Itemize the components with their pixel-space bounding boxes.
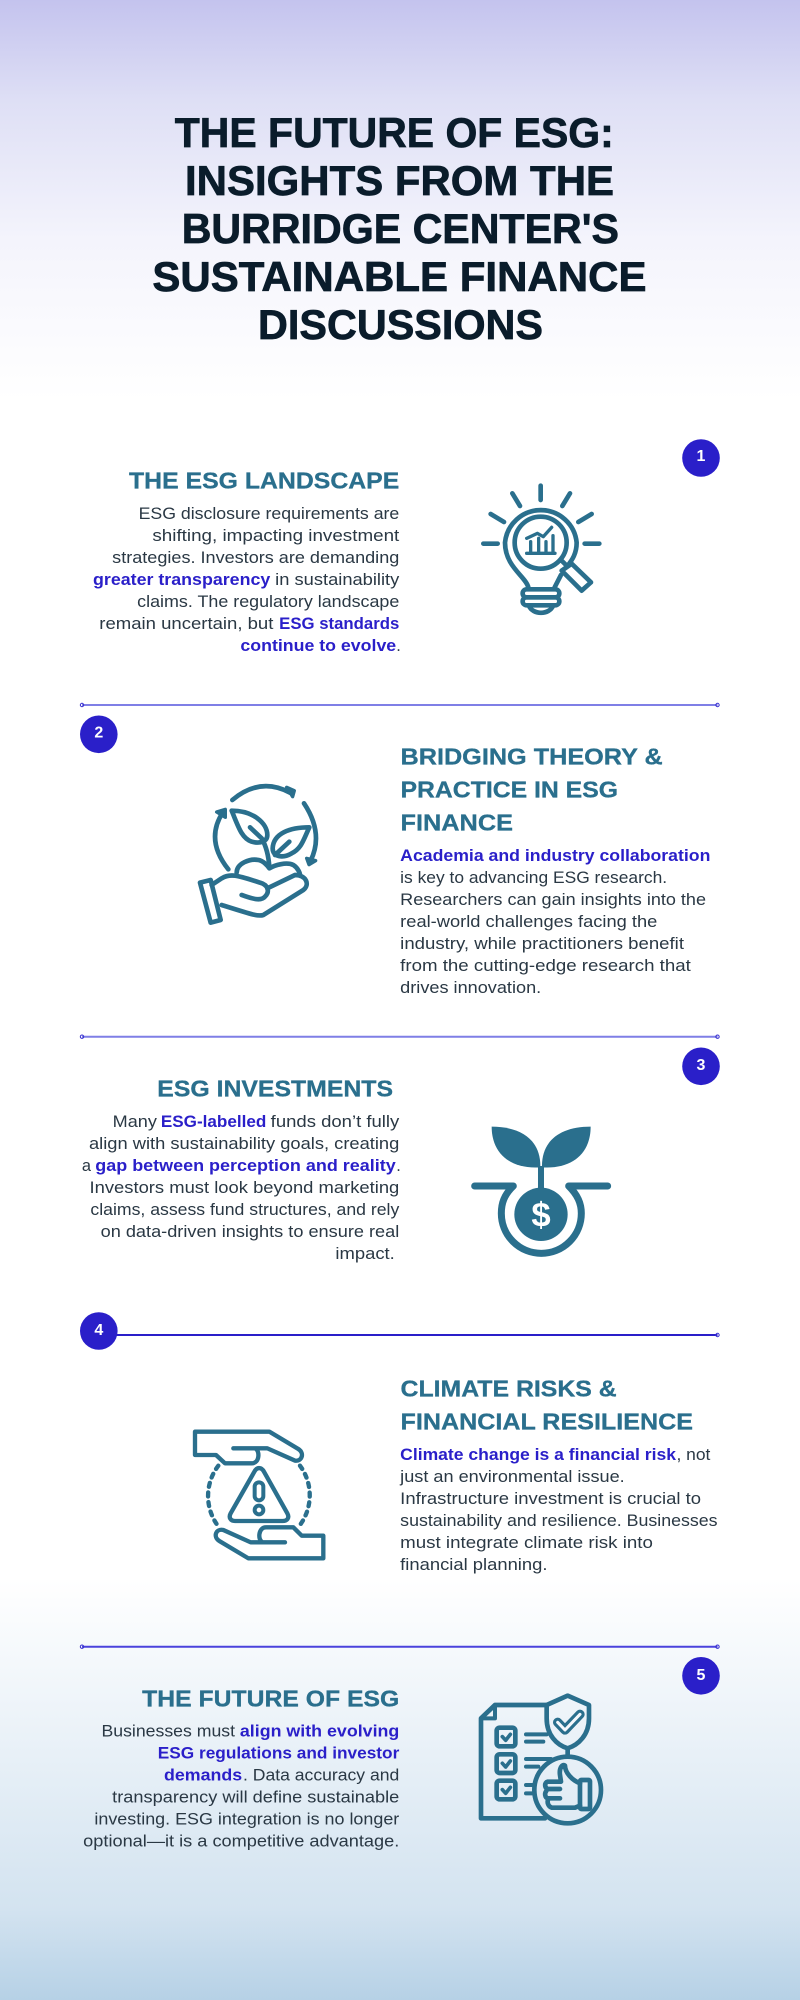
text block: the ESG landscape: in sustainability (275, 571, 400, 589)
text block: climate risks: Climate change is a financial risk (400, 1446, 677, 1464)
panel: ESG investments (82, 1048, 720, 1263)
icon: sprout growing from dollar coin (475, 1127, 608, 1253)
number badge 1: 1 (697, 448, 706, 465)
text block: ESG investments: Many (113, 1113, 158, 1131)
text block: the ESG landscape (93, 505, 401, 655)
text block: ESG investments: gap between perception and reality (95, 1157, 397, 1175)
heading: climate risks: FINANCIAL RESILIENCE (400, 1408, 693, 1434)
text block: bridging theory and practice: drives innovation. (400, 979, 541, 997)
text block: climate risks: just an environmental issue. (399, 1468, 625, 1486)
text block: the ESG landscape: continue to evolve (240, 637, 396, 655)
text block: the ESG landscape: remain uncertain, but (99, 615, 274, 633)
text block: bridging theory and practice: Academia and industry collaboration (400, 847, 710, 865)
text block: bridging theory and practice: Researchers can gain insights into the (400, 891, 706, 909)
panel: bridging theory and practice (80, 716, 710, 997)
divider 4 (80, 1645, 719, 1648)
text block: the ESG landscape: greater transparency (93, 571, 271, 589)
text block: the ESG landscape: shifting, impacting investment (152, 527, 400, 545)
text block: bridging theory and practice: real-world challenges facing the (400, 913, 657, 931)
panel: climate risks (80, 1312, 718, 1574)
panel: the ESG landscape (93, 439, 720, 655)
text block: bridging theory and practice (400, 847, 710, 997)
divider 2 (80, 1035, 719, 1038)
text block: the future of ESG: ESG regulations and investor (158, 1745, 400, 1763)
text block: the future of ESG (83, 1723, 400, 1851)
icon: hand holding plant with cycle arrows (200, 786, 316, 923)
title: INSIGHTS FROM THE (185, 157, 614, 204)
text block: ESG investments: claims, assess fund structures, and rely (90, 1201, 400, 1219)
divider 1 (80, 703, 719, 707)
title: BURRIDGE CENTER'S (182, 205, 619, 252)
text block: the ESG landscape: ESG standards (279, 615, 399, 633)
text block: the ESG landscape: ESG disclosure requirements are (139, 505, 399, 523)
icon: hands protecting warning triangle (195, 1432, 323, 1558)
text block: climate risks: sustainability and resilience. Businesses (400, 1512, 718, 1530)
number badge 3: 3 (697, 1057, 706, 1074)
text block: the future of ESG: Businesses must (102, 1723, 235, 1741)
text block: ESG investments (82, 1113, 401, 1263)
text block: the ESG landscape: strategies. Investors are demanding (112, 549, 399, 567)
text block: ESG investments: funds don’t fully (271, 1113, 400, 1131)
text block: the future of ESG: align with evolving (240, 1723, 399, 1741)
text block: climate risks: , not (676, 1446, 711, 1464)
text block: climate risks (399, 1446, 718, 1574)
text block: ESG investments: ESG-labelled (161, 1113, 266, 1131)
text block: ESG investments: on data-driven insights to ensure real (101, 1223, 399, 1241)
text block: ESG investments: Investors must look beyond marketing (90, 1179, 399, 1197)
text block: ESG investments: impact. (335, 1245, 395, 1263)
heading: climate risks: CLIMATE RISKS & (400, 1375, 617, 1401)
title: DISCUSSIONS (258, 301, 543, 348)
number badge 2: 2 (94, 724, 103, 742)
text block: bridging theory and practice: is key to advancing ESG research. (400, 869, 667, 887)
icon: lightbulb with magnifier and chart (483, 486, 599, 613)
heading: climate risks (400, 1375, 693, 1434)
icon: sprout growing from dollar coin: $ (531, 1196, 551, 1234)
text block: the future of ESG: demands (164, 1767, 242, 1785)
number badge 4: 4 (94, 1322, 103, 1339)
text block: ESG investments: align with sustainability goals, creating (89, 1135, 399, 1153)
title (152, 109, 646, 348)
text block: ESG investments: a (82, 1157, 92, 1175)
text block: climate risks: financial planning. (400, 1556, 548, 1574)
text block: the ESG landscape: . (396, 637, 401, 655)
heading: the future of ESG: THE FUTURE OF ESG (142, 1685, 399, 1711)
text block: ESG investments: . (396, 1157, 401, 1175)
text block: climate risks: Infrastructure investment is crucial to (400, 1490, 701, 1508)
number badge 2 (80, 716, 118, 753)
number badge 4 (80, 1312, 118, 1350)
text block: the ESG landscape: claims. The regulatory landscape (137, 593, 399, 611)
number badge 3 (682, 1048, 720, 1085)
text block: the future of ESG: transparency will define sustainable (112, 1789, 399, 1807)
title: SUSTAINABLE FINANCE (152, 253, 646, 300)
text block: climate risks: must integrate climate risk into (400, 1534, 653, 1552)
panel: the future of ESG (83, 1657, 720, 1851)
number badge 5: 5 (697, 1667, 706, 1684)
heading: bridging theory and practice: FINANCE (400, 809, 513, 835)
heading: bridging theory and practice: PRACTICE IN ESG (400, 776, 618, 802)
heading: bridging theory and practice: BRIDGING THEORY & (400, 743, 663, 769)
icon: checklist with shield and thumbs up (481, 1696, 601, 1823)
heading: bridging theory and practice (400, 743, 663, 835)
heading: ESG investments: ESG INVESTMENTS (157, 1075, 393, 1101)
text block: the future of ESG: investing. ESG integration is no longer (94, 1811, 400, 1829)
heading: the ESG landscape: THE ESG LANDSCAPE (129, 467, 399, 493)
divider 3 (110, 1333, 719, 1337)
title: THE FUTURE OF ESG: (175, 109, 614, 156)
number badge 1 (682, 439, 720, 477)
text block: bridging theory and practice: industry, while practitioners benefit (400, 935, 684, 953)
text block: the future of ESG: optional—it is a competitive advantage. (83, 1833, 399, 1851)
text block: the future of ESG: . Data accuracy and (243, 1767, 399, 1785)
number badge 5 (682, 1657, 720, 1695)
text block: bridging theory and practice: from the cutting-edge research that (400, 957, 691, 975)
